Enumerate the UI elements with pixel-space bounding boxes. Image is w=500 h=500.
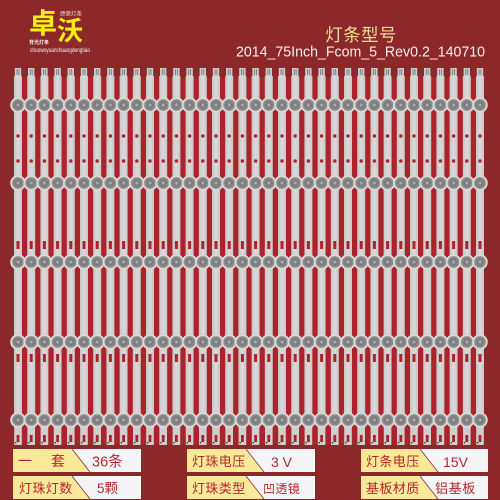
spec: LED count: 5颗 xyxy=(97,481,119,496)
logo: large character 沃: 沃 xyxy=(57,16,83,46)
spec: LED voltage: 3 V xyxy=(271,454,293,470)
logo: large character 卓: 卓 xyxy=(29,8,57,39)
logo: tagline: 原装灯条 xyxy=(60,10,83,18)
heading: strip model xyxy=(236,25,485,60)
spec: strip voltage: 15V xyxy=(443,454,469,470)
spec: LED voltage xyxy=(187,449,315,472)
spec: LED voltage: 灯珠电压 xyxy=(192,454,246,469)
spec: board material: 基板材质 xyxy=(366,481,420,496)
spec: LED type: 灯珠类型 xyxy=(192,481,246,496)
spec: strip voltage: 灯条电压 xyxy=(366,454,420,469)
spec: set count: 36条 xyxy=(92,454,123,470)
spec: LED count: 灯珠灯数 xyxy=(19,481,73,496)
spec: set count xyxy=(13,449,141,472)
spec: LED count xyxy=(13,476,141,499)
heading label: 灯条型号 xyxy=(325,25,397,45)
spec: LED type xyxy=(187,476,315,499)
logo: pinyin: chuowoyuanchuangdengtiao xyxy=(30,48,91,54)
spec: set count: 一 xyxy=(18,453,32,469)
spec: strip voltage xyxy=(361,449,488,472)
spec: set count: 套 xyxy=(51,453,65,469)
product photo: 36 LED backlight strips xyxy=(10,68,488,445)
model number: 2014_75Inch_Fcom_5_Rev0.2_140710 xyxy=(236,44,485,60)
spec: board material xyxy=(361,476,488,499)
spec: board material: 铝基板 xyxy=(435,481,476,496)
spec: LED type: 凹透镜 xyxy=(263,481,300,496)
logo: subtitle: 背光灯条 xyxy=(29,39,49,46)
brand logo xyxy=(29,8,91,54)
